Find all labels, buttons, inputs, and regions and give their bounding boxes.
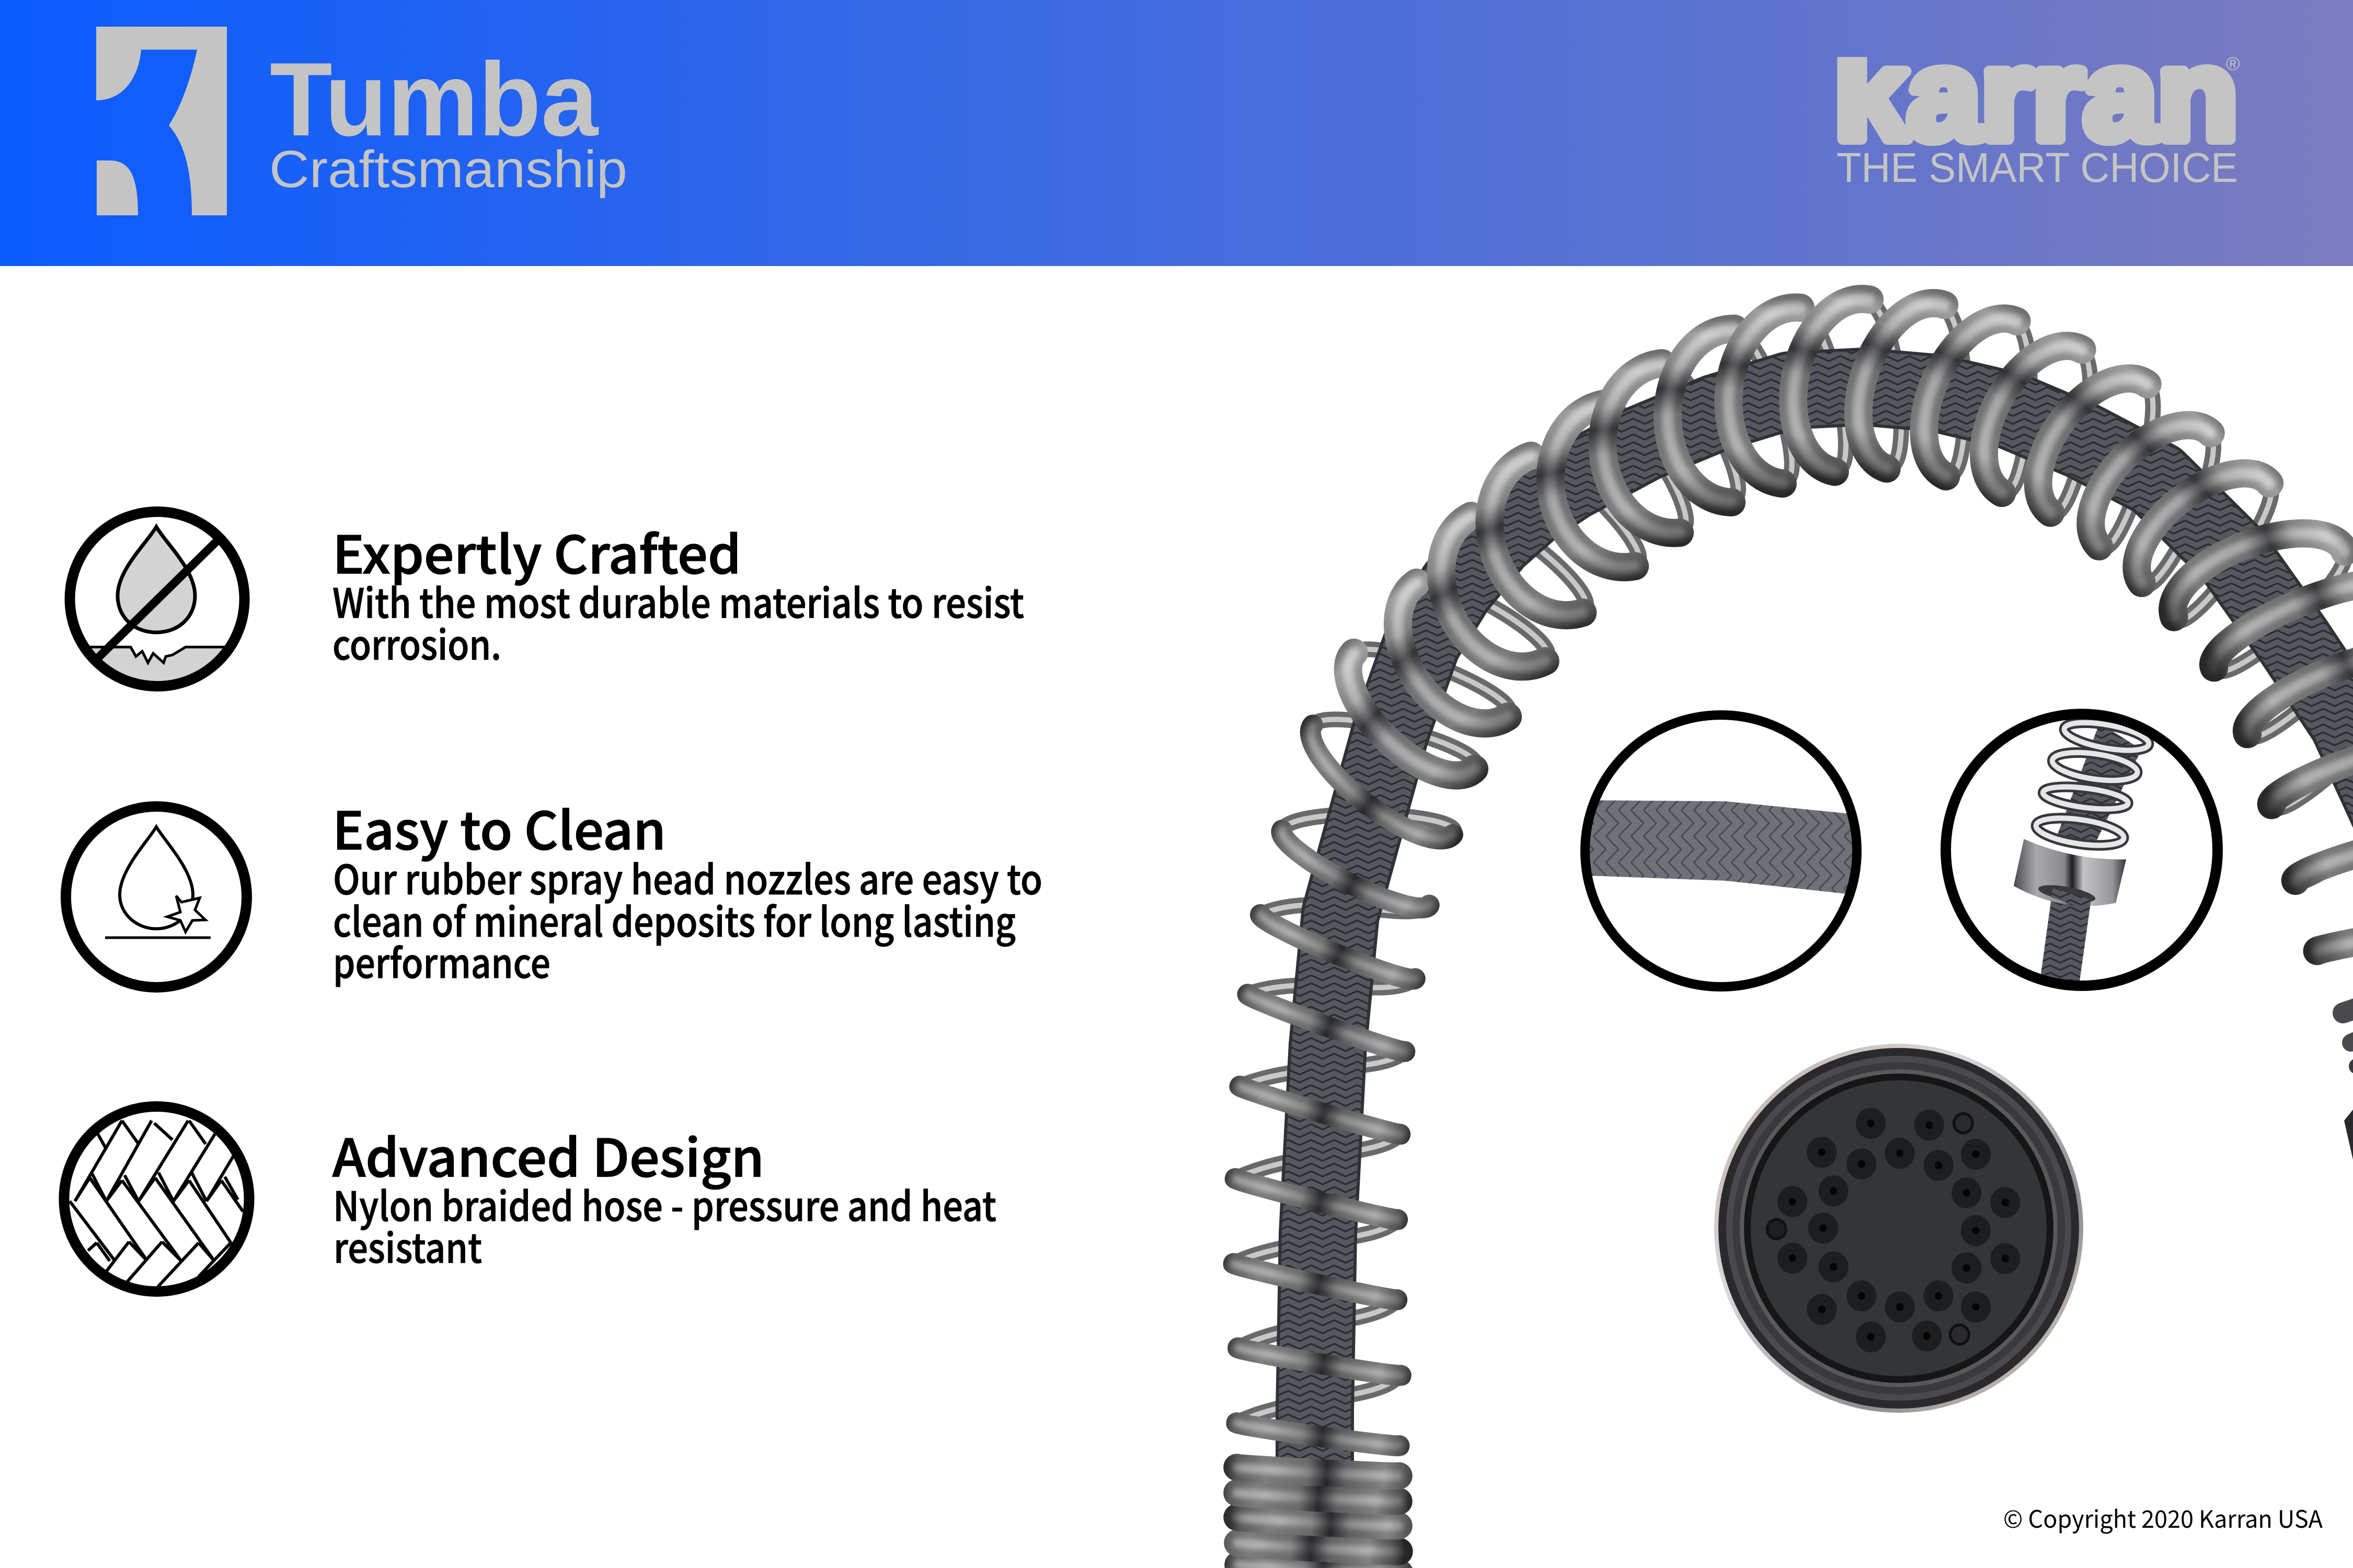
spray head nozzle face (1714, 1044, 2083, 1413)
icon: drop with sparkle (66, 806, 247, 987)
heading: Expertly Crafted (332, 513, 741, 589)
product image: coiled pull-down hose (1233, 287, 2353, 1568)
braided hose (1315, 387, 2353, 1568)
description: clean of mineral deposits for long lasting (333, 891, 1016, 949)
description (332, 572, 1024, 672)
inset: spring and collar detail (1946, 714, 2218, 989)
description (333, 848, 1042, 990)
feature: Easy to Clean (66, 789, 1042, 990)
description (333, 1175, 996, 1275)
coil spring: front strands (1233, 287, 2353, 1568)
heading: Advanced Design (332, 1116, 764, 1192)
header banner (0, 0, 2353, 266)
description: corrosion. (332, 614, 501, 672)
inset: braided hose detail (1584, 715, 1857, 987)
description: resistant (334, 1217, 482, 1275)
coil spring: back strands (1234, 303, 2353, 1423)
icon: no corrosion drop (70, 512, 245, 695)
tagline: THE SMART CHOICE (1837, 144, 2238, 191)
registered mark: ® (2226, 53, 2240, 74)
icon: R brand mark (96, 27, 227, 215)
description: Nylon braided hose - pressure and heat (333, 1175, 996, 1233)
rubber nozzles (1767, 1114, 2015, 1346)
description: performance (333, 932, 550, 990)
copyright: © Copyright 2020 Karran USA (2003, 1501, 2323, 1535)
icon: herringbone braid (64, 1106, 249, 1297)
heading: Easy to Clean (332, 789, 666, 864)
banner gradient (0, 0, 2353, 266)
logo: karran: karran (1834, 23, 2238, 166)
description: With the most durable materials to resist (332, 572, 1024, 630)
subtitle: Craftsmanship: Craftsmanship (269, 140, 627, 199)
description: Our rubber spray head nozzles are easy to (333, 848, 1042, 906)
feature: Advanced Design (64, 1106, 996, 1297)
title: Tumba: Tumba (270, 41, 599, 158)
feature: Expertly Crafted (70, 512, 1024, 695)
